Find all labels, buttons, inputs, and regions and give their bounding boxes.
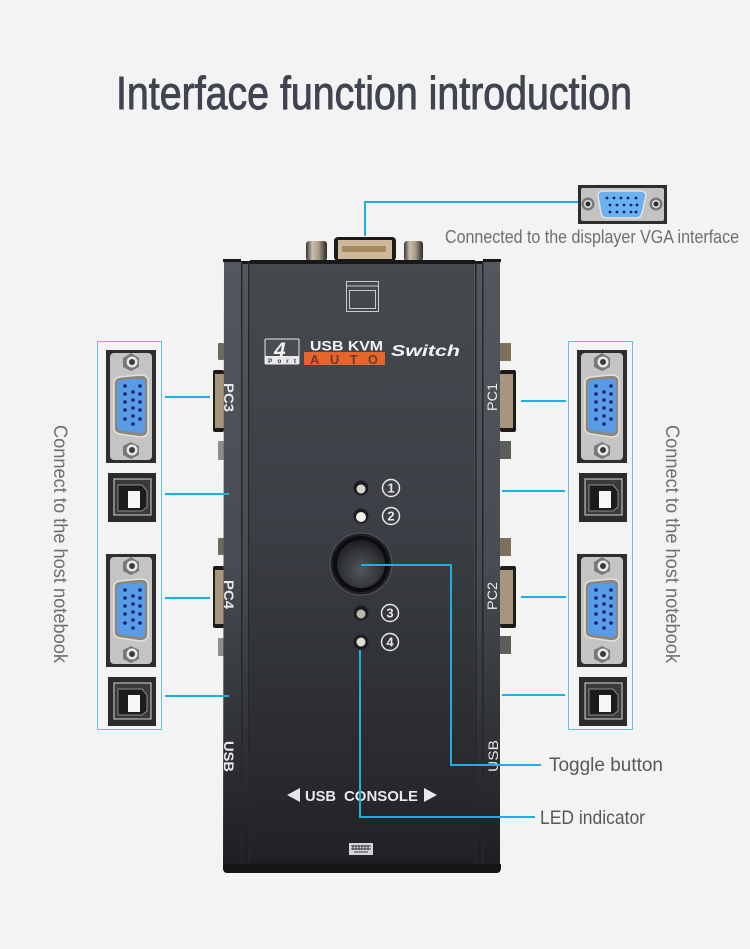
label: right host notebook: Connect to the host notebook <box>661 425 683 663</box>
side connectors left <box>213 343 224 656</box>
icon: display VGA port <box>578 185 667 224</box>
icon: VGA port PC3 <box>106 350 156 463</box>
icon: USB port PC3 <box>108 473 156 522</box>
label: left host notebook: Connect to the host notebook <box>49 425 71 663</box>
toggle button <box>330 533 392 595</box>
port labels: USB <box>221 741 237 772</box>
icon: USB port PC4 <box>108 677 156 726</box>
callout lines <box>165 202 578 817</box>
LED numbers <box>382 480 400 650</box>
label: LED indicator: LED indicator <box>540 807 645 829</box>
port labels <box>221 383 501 772</box>
icon: keyboard <box>349 843 373 855</box>
port labels: PC2 <box>484 582 500 610</box>
USB CONSOLE label <box>287 788 437 805</box>
USB CONSOLE label: USB <box>305 788 336 805</box>
logo: 4 Port USB KVM AUTO Switch: AUTO <box>310 352 378 367</box>
logo: 4 Port USB KVM AUTO Switch: 4 <box>273 339 286 362</box>
icon: VGA port PC2 <box>577 554 627 667</box>
icon: USB port PC1 <box>579 473 627 522</box>
logo: 4 Port USB KVM AUTO Switch: USB KVM <box>310 338 383 354</box>
icon: VGA port PC4 <box>106 554 156 667</box>
label: toggle button: Toggle button <box>549 754 663 776</box>
LED numbers: 2 <box>387 508 395 524</box>
icon: monitor <box>346 282 378 312</box>
LED numbers: 3 <box>386 606 394 620</box>
left port group frame <box>98 342 162 730</box>
title: Interface function introduction <box>116 67 632 119</box>
port labels: PC4 <box>221 580 237 609</box>
top VGA connector on the switch <box>306 237 423 261</box>
icon: VGA port PC1 <box>577 350 627 463</box>
LED numbers: 4 <box>386 634 394 650</box>
icon: USB port PC2 <box>579 677 627 726</box>
port labels: PC3 <box>221 383 237 412</box>
right port group frame <box>568 342 632 730</box>
logo: 4 Port USB KVM AUTO Switch: Port <box>268 358 297 365</box>
logo: 4 Port USB KVM AUTO Switch <box>265 338 460 367</box>
port labels: PC1 <box>484 383 500 411</box>
KVM switch body <box>213 259 516 873</box>
USB CONSOLE label: CONSOLE <box>344 788 418 805</box>
LED indicators <box>354 480 368 650</box>
LED numbers: 1 <box>387 480 395 496</box>
side connectors right <box>500 343 516 654</box>
logo: 4 Port USB KVM AUTO Switch: Switch <box>391 343 460 360</box>
port labels: USB <box>485 740 501 772</box>
